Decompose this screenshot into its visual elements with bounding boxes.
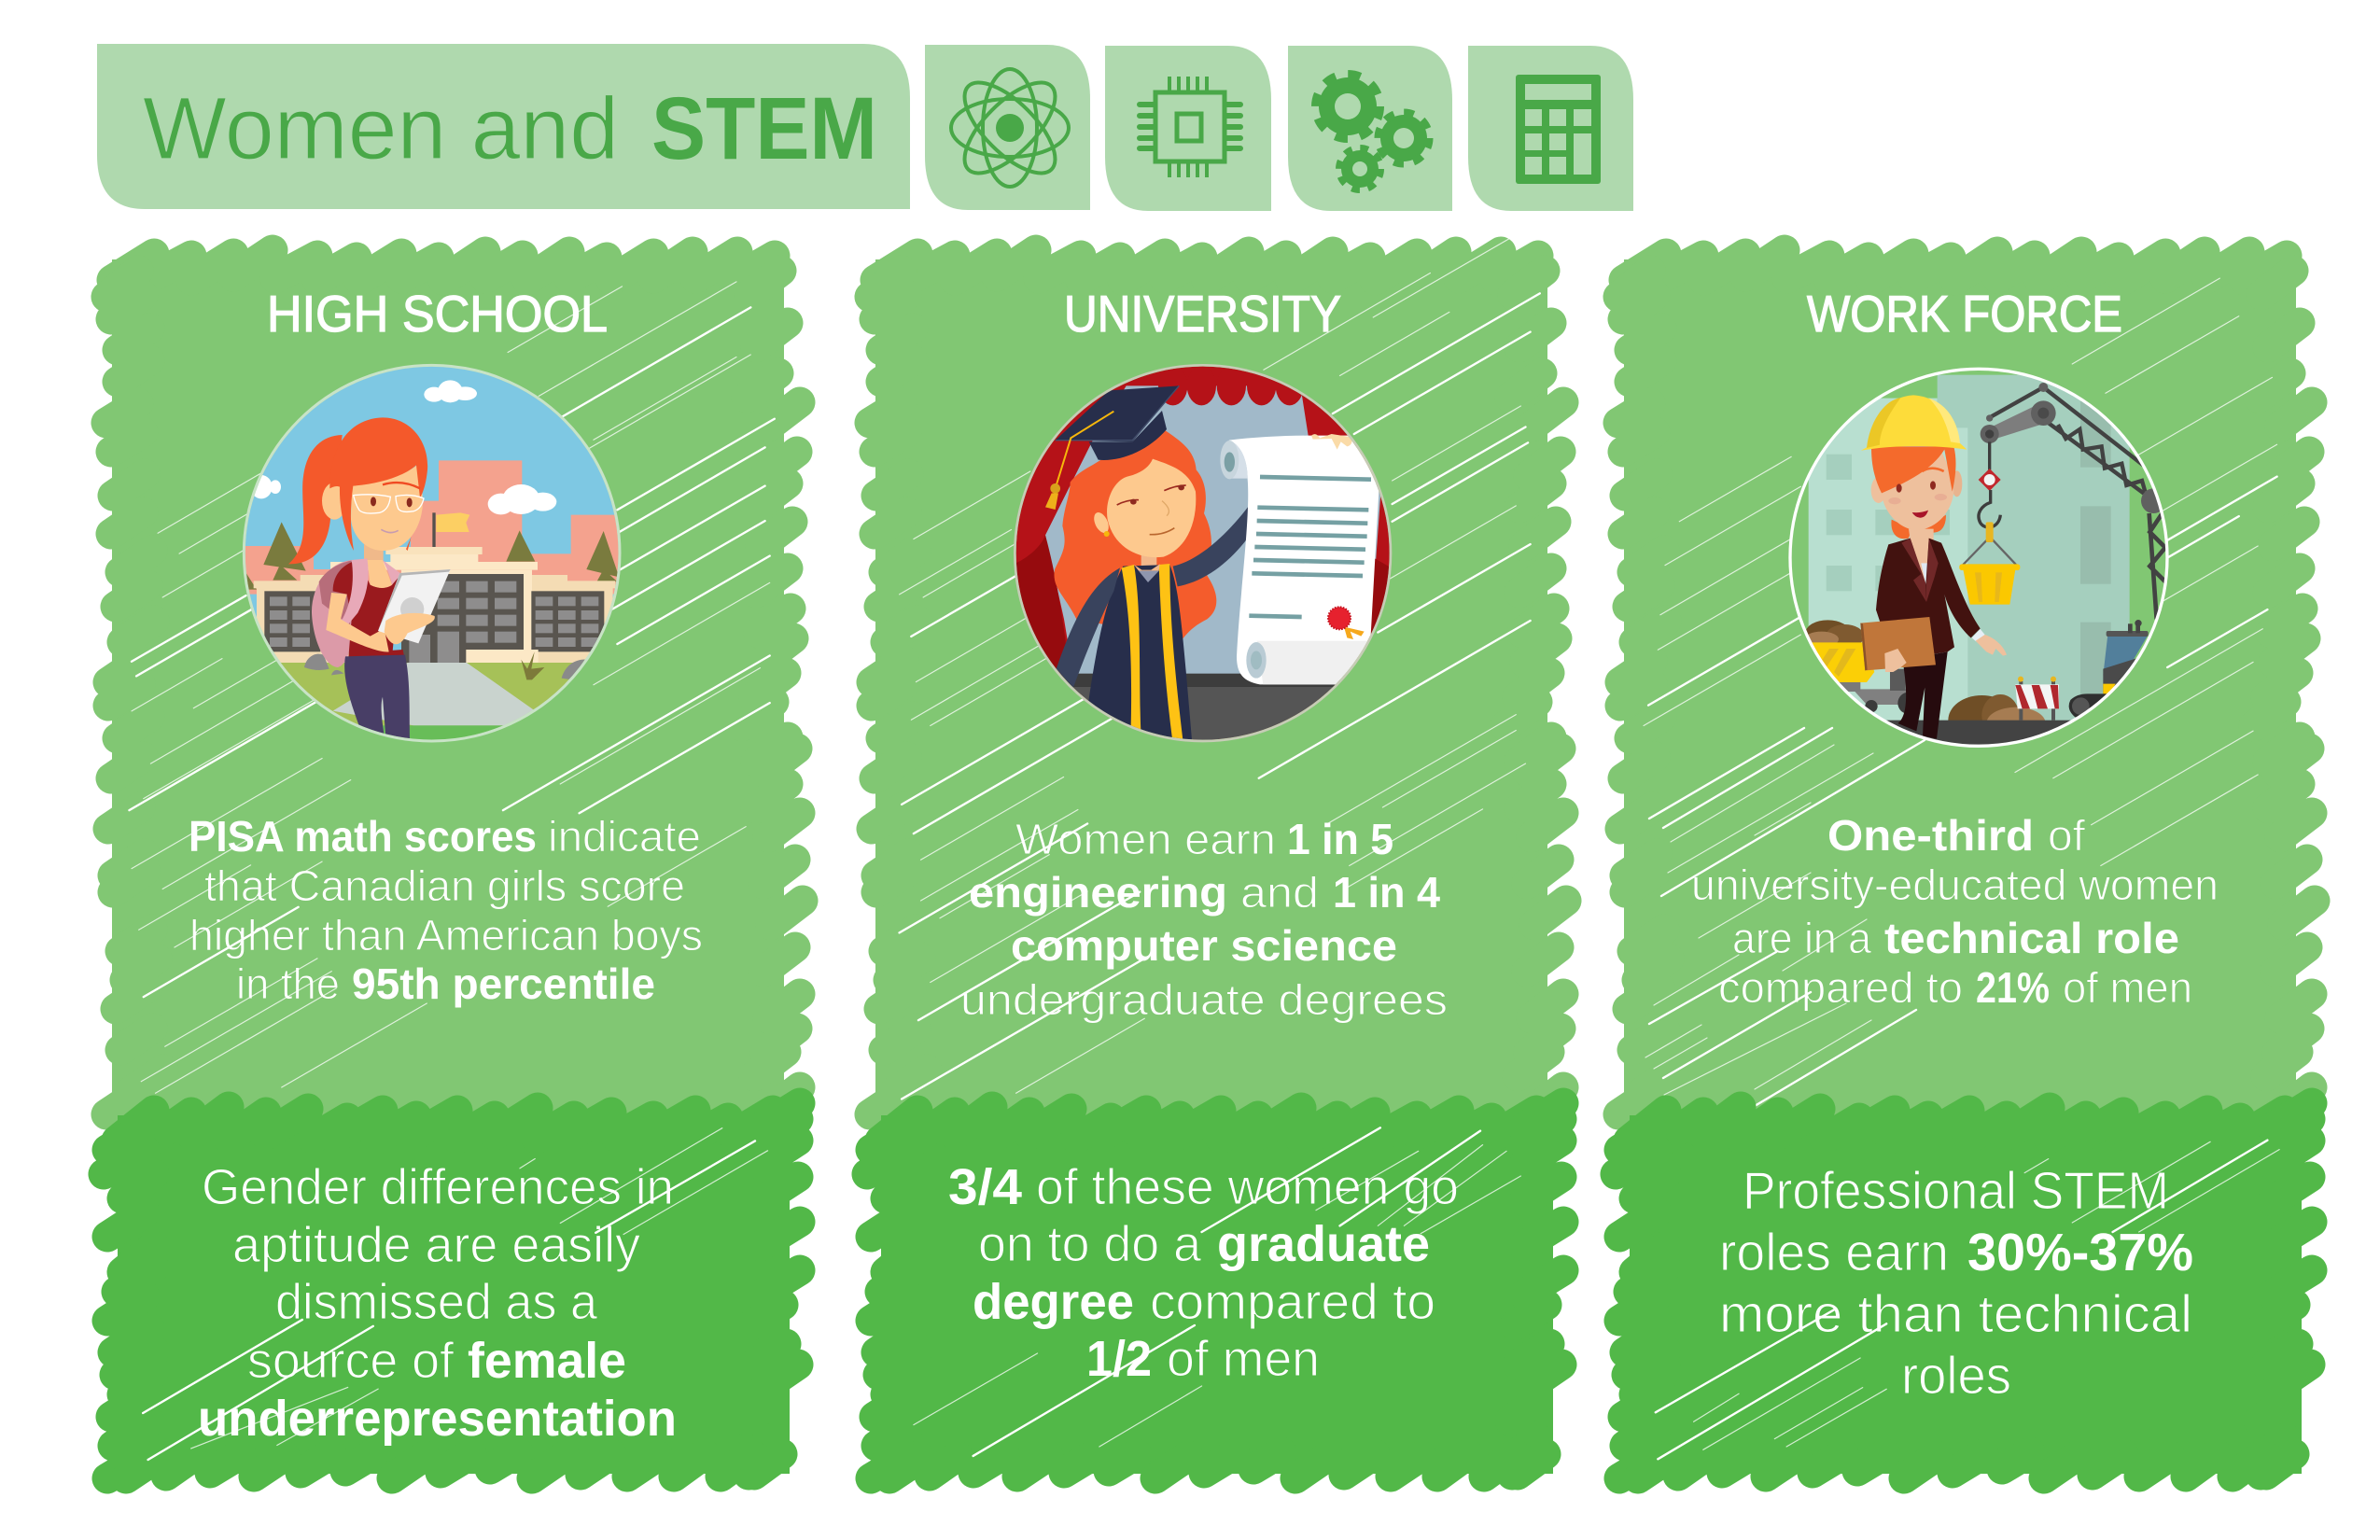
text block: university statistic: and (1240, 868, 1319, 917)
title banner: Women and (143, 79, 619, 178)
panel: university (870, 230, 1566, 1141)
text block: work force statistic: university-educated women (1691, 861, 2219, 909)
text block: graduate degrees: of these women go (1036, 1159, 1459, 1215)
text block: professional STEM pay: Professional STEM (1743, 1161, 2169, 1221)
text block: graduate degrees (948, 1159, 1459, 1387)
text block: graduate degrees: 3/4 (948, 1159, 1022, 1215)
text block: work force statistic: technical role (1884, 914, 2179, 962)
text block: professional STEM pay (1719, 1161, 2193, 1406)
icon tab: microchip (1105, 46, 1271, 211)
text block: high school statistic: indicate (548, 812, 701, 861)
text block: graduate degrees: degree (973, 1274, 1134, 1330)
text block: high school statistic: PISA math scores (189, 812, 537, 861)
text block: professional STEM pay: 30%-37% (1967, 1223, 2193, 1282)
text block: university statistic: engineering (969, 868, 1227, 917)
panel: high school (106, 250, 803, 1141)
text block: university statistic: Women earn (1015, 815, 1276, 863)
panel: high school takeaway (104, 1103, 800, 1478)
icon tab: atom (925, 45, 1090, 210)
icon tab: calculator (1468, 46, 1633, 211)
text block: gender differences: Gender differences in (202, 1159, 674, 1215)
text block: work force statistic: are in a (1732, 914, 1871, 962)
panel: university takeaway (867, 1103, 1563, 1478)
panel: work force takeaway (1616, 1103, 2312, 1478)
text block: graduate degrees: on to do a (978, 1216, 1202, 1272)
text block: university statistic: undergraduate degrees (960, 975, 1448, 1024)
text block: high school statistic: in the (236, 959, 340, 1008)
text block: gender differences: underrepresentation (198, 1391, 677, 1447)
illustration: student with tablet in front of school (243, 364, 623, 744)
text block: professional STEM pay: roles earn (1719, 1223, 1949, 1282)
title banner: STEM (651, 79, 877, 178)
heading: work force: WORK FORCE (1807, 285, 2122, 343)
text block: university statistic: 1 in 5 (1287, 815, 1393, 863)
text block: graduate degrees: of men (1167, 1331, 1320, 1387)
text block: high school statistic: that Canadian girls score (204, 861, 685, 910)
text block: professional STEM pay: roles (1901, 1346, 2011, 1406)
text block: work force statistic: compared to (1718, 963, 1963, 1012)
icon tab: gears (1288, 46, 1452, 211)
text block: work force statistic (1691, 811, 2219, 1012)
illustration: graduate holding a diploma (1011, 364, 1397, 746)
text block: graduate degrees: 1/2 (1086, 1331, 1152, 1387)
text block: university statistic: 1 in 4 (1333, 868, 1440, 917)
text block: high school statistic: higher than American boys (189, 911, 703, 959)
heading: university: UNIVERSITY (1064, 285, 1341, 343)
text block: work force statistic: of men (2063, 963, 2192, 1012)
text block: work force statistic: 21% (1976, 963, 2050, 1012)
text block: gender differences (198, 1159, 677, 1447)
panel: work force (1618, 250, 2315, 1141)
text block: high school statistic (189, 812, 703, 1008)
text block: graduate degrees: compared to (1150, 1274, 1435, 1330)
text block: high school statistic: 95th percentile (352, 959, 655, 1008)
text block: university statistic (960, 815, 1448, 1024)
illustration: construction manager with crane (1789, 369, 2168, 749)
text block: work force statistic: of (2048, 811, 2085, 860)
text block: graduate degrees: graduate (1217, 1216, 1430, 1272)
text block: gender differences: dismissed as a (275, 1274, 598, 1330)
heading: high school: HIGH SCHOOL (267, 285, 608, 343)
text block: work force statistic: One-third (1827, 811, 2034, 860)
text block: gender differences: female (468, 1333, 626, 1389)
text block: professional STEM pay: more than technical (1719, 1284, 2192, 1344)
text block: university statistic: computer science (1011, 921, 1397, 970)
text block: gender differences: source of (247, 1333, 455, 1389)
text block: gender differences: aptitude are easily (232, 1217, 640, 1273)
title banner (97, 44, 910, 209)
